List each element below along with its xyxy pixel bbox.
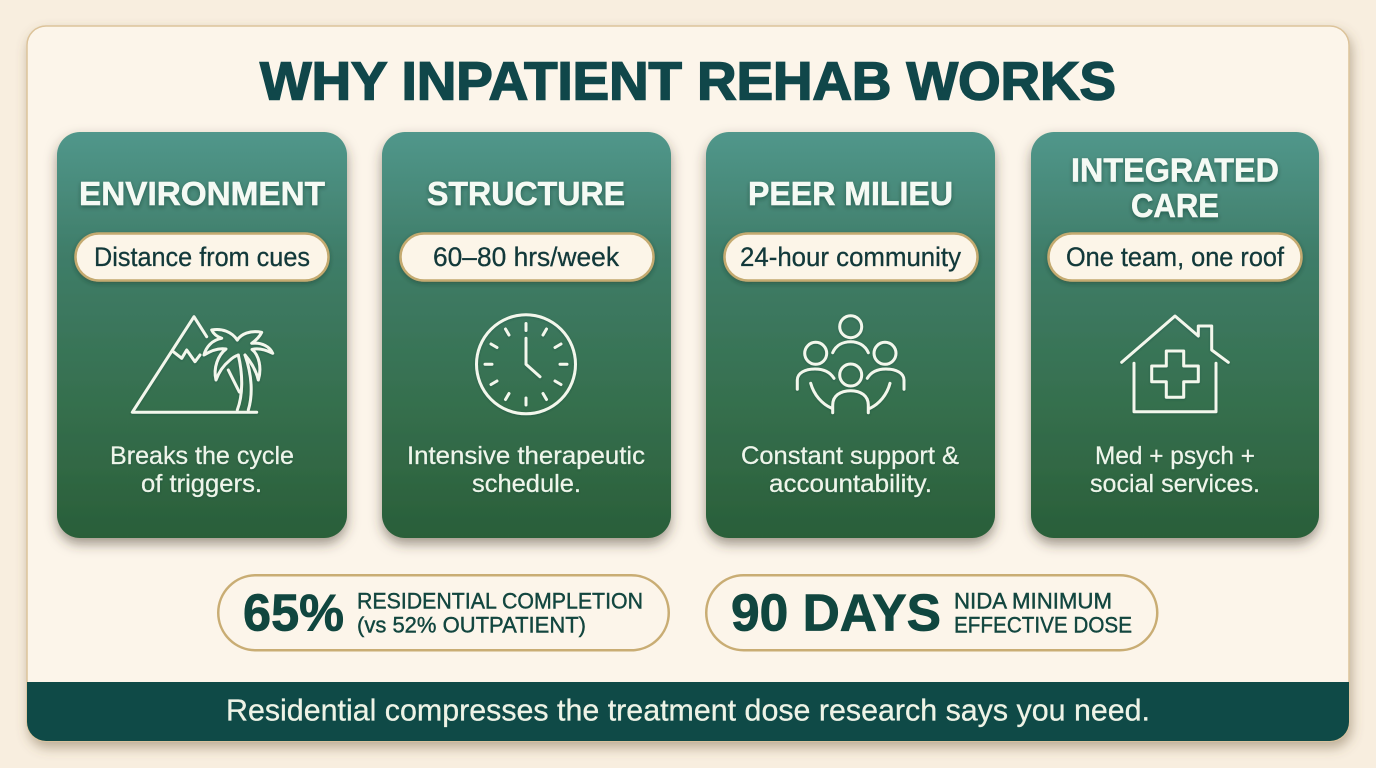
heading: integrated care: CARE [1131,187,1219,224]
description: peer milieu: accountability. [769,470,932,498]
description: environment: Breaks the cycle [110,442,294,470]
description: structure: Intensive therapeutic [407,442,645,470]
pill: one team, one roof: One team, one roof [1066,242,1285,272]
stat: 65 percent completion: (vs 52% OUTPATIENT) [357,612,586,638]
stat: 65 percent completion [218,575,669,650]
description: integrated care: social services. [1090,470,1260,498]
stat: 90 days [706,575,1157,650]
description: peer milieu [741,442,959,498]
icon: house with medical cross [1122,316,1228,412]
title: WHY INPATIENT REHAB WORKS [260,52,1116,112]
description: integrated care: Med + psych + [1095,442,1255,470]
heading: integrated care: INTEGRATED [1071,152,1279,188]
footer banner: Residential compresses the treatment dose research says you need. [226,693,1150,728]
footer banner [27,682,1349,741]
stat: 90 days: 90 DAYS [731,584,941,642]
icon: group of people [797,316,904,413]
stat: 90 days: EFFECTIVE DOSE [954,612,1132,638]
heading: peer milieu: PEER MILIEU [748,175,953,212]
description: structure: schedule. [472,470,581,498]
panel: integrated care [1031,132,1319,538]
heading: integrated care [1071,152,1279,224]
icon: mountain and palm tree [132,317,273,412]
description: environment: of triggers. [141,470,262,498]
pill: 24-hour community: 24-hour community [740,242,962,272]
icon: clock [476,315,576,414]
pill: distance from cues: Distance from cues [94,242,310,272]
pill: 24-hour community [724,234,978,280]
panel: environment [57,132,347,538]
pill: one team, one roof [1048,234,1302,280]
description: integrated care [1090,442,1260,498]
pill: distance from cues [76,234,328,280]
description: peer milieu: Constant support & [741,442,959,470]
stat: 90 days: NIDA MINIMUM [954,588,1112,614]
pill: hours per week [400,234,654,280]
description: structure [407,442,645,498]
pill: hours per week: 60–80 hrs/week [433,242,620,272]
panel: structure [382,132,671,538]
heading: structure: STRUCTURE [427,175,625,212]
panel: peer milieu [706,132,995,538]
stat: 65 percent completion: 65% [243,584,344,642]
heading: environment: ENVIRONMENT [79,175,325,212]
stat: 65 percent completion: RESIDENTIAL COMPLETION [357,588,643,614]
description: environment [110,442,294,498]
